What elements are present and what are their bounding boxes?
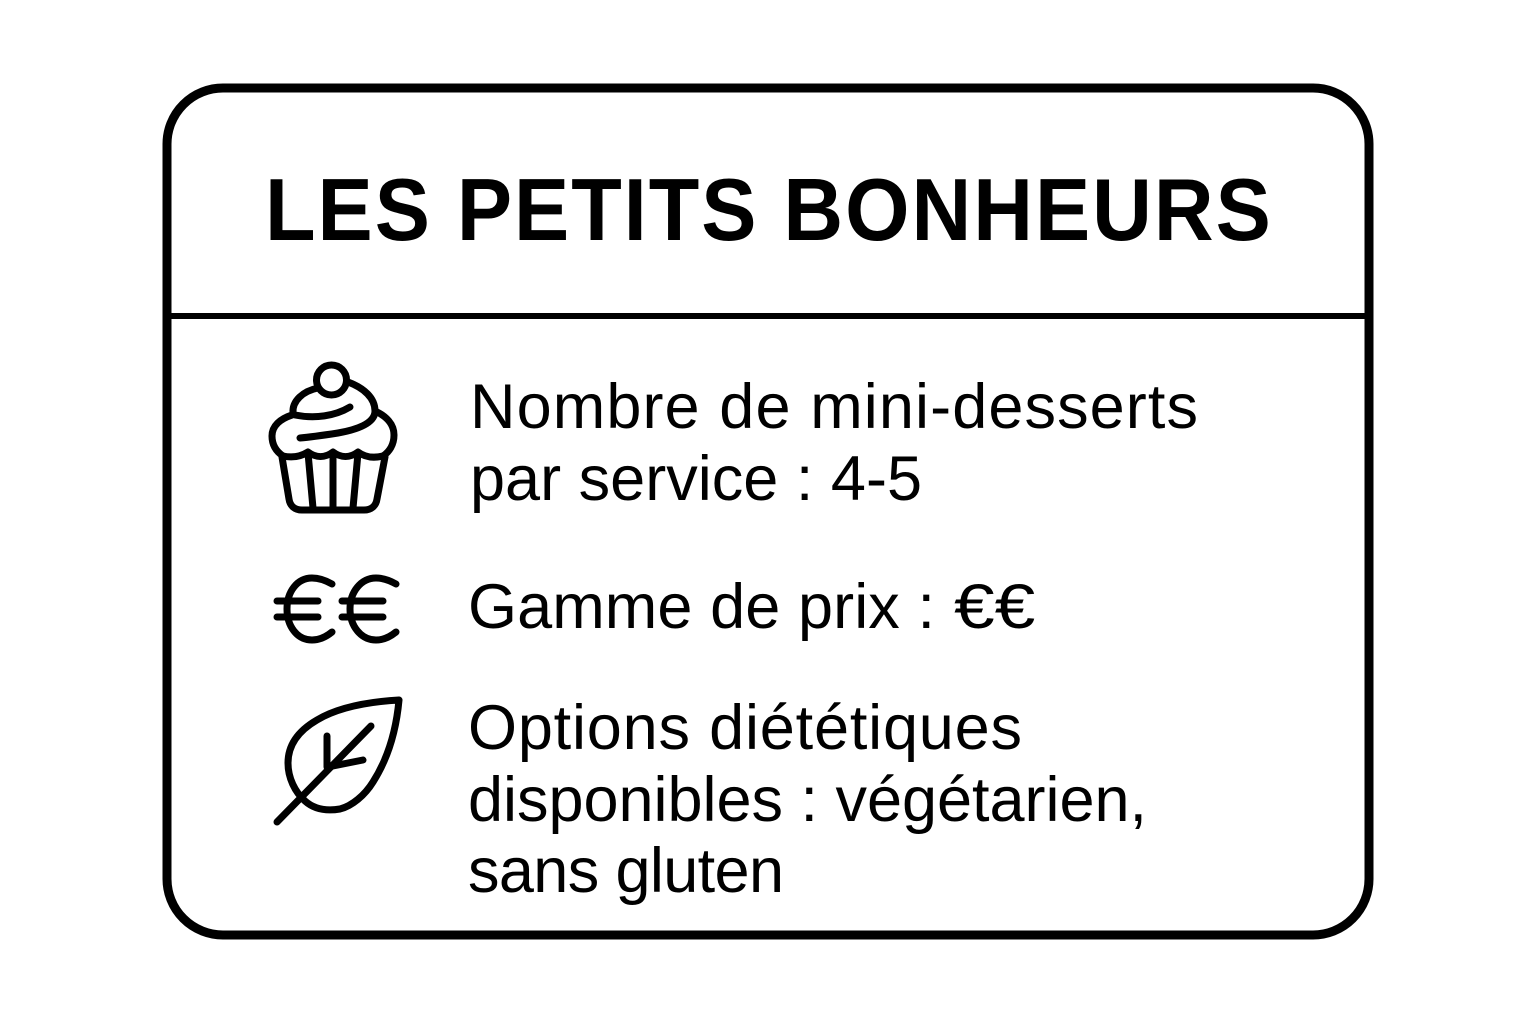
text: price range: €€ <box>954 572 1035 642</box>
text: dietary options <box>468 693 1147 906</box>
text: dietary options: sans gluten <box>468 836 784 906</box>
panel: card <box>167 88 1369 935</box>
text: dietary options: Options diététiques <box>468 693 1022 763</box>
icon: leaf <box>277 700 399 822</box>
icon: cupcake <box>272 365 394 510</box>
title: LES PETITS BONHEURS <box>265 162 1271 260</box>
text: dietary options: disponibles : végétarien, <box>468 765 1147 835</box>
text: mini-desserts <box>470 372 1198 514</box>
text: price range: Gamme de prix : <box>468 572 935 642</box>
text: mini-desserts: par service : 4-5 <box>470 444 922 514</box>
text: mini-desserts: Nombre de mini-desserts <box>470 372 1198 442</box>
icon: euro signs <box>277 578 396 640</box>
